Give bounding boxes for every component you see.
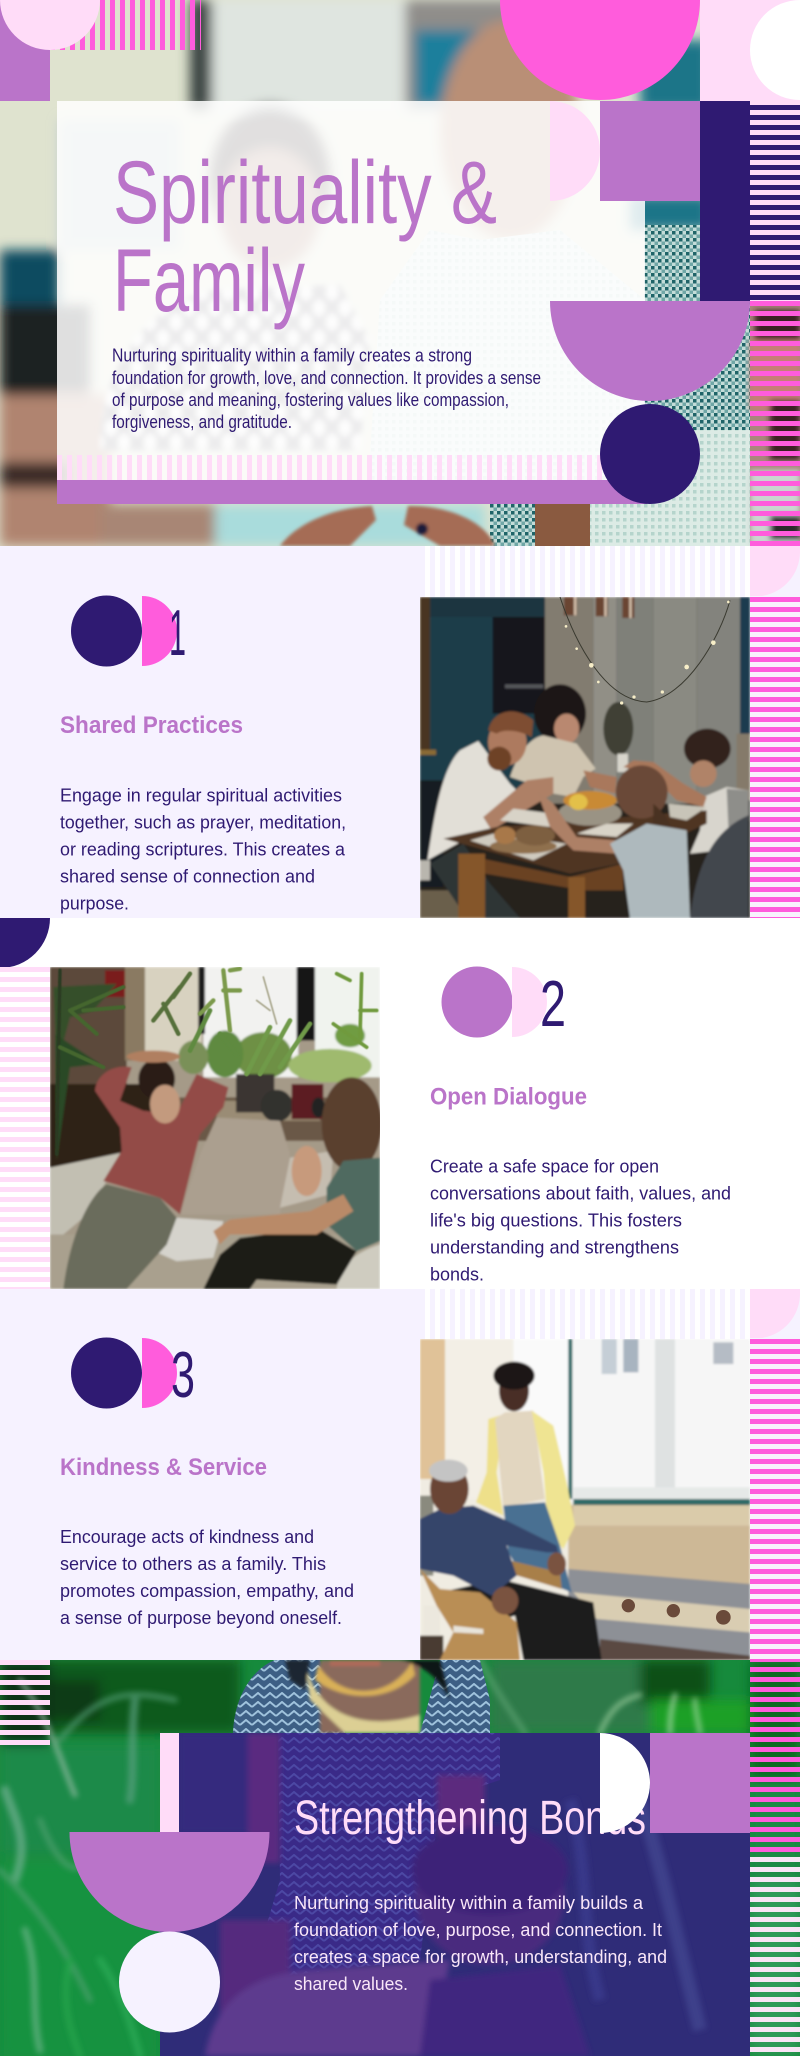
right magenta stripes: [750, 1660, 800, 1856]
section 3 magenta stripes: [750, 1339, 800, 1660]
title: Family: [113, 230, 305, 330]
panel: closing: [0, 1660, 800, 2056]
section 1 body: together, such as prayer, meditation,: [60, 812, 346, 832]
section 2 photo: two women on sofa: [50, 967, 380, 1289]
section 1 photo: family praying at table: [420, 597, 750, 918]
translucent title card: [57, 101, 645, 504]
section 1: shared practices: 1: [169, 596, 186, 669]
closing body: Nurturing spirituality within a family builds a: [294, 1893, 644, 1913]
closing photo: woman and child in grass: [0, 1660, 800, 2056]
section 2 body: bonds.: [430, 1264, 484, 1284]
section 2 body: Create a safe space for open: [430, 1156, 659, 1176]
section 1 background: [0, 546, 420, 918]
section 2 number icon: [442, 966, 566, 1040]
section 1 body: [60, 786, 346, 914]
navy circle: [600, 404, 700, 504]
section 3 body: [60, 1527, 354, 1628]
header family photo: [0, 0, 800, 546]
section 3 photo: man seated and woman standing: [420, 1339, 750, 1660]
title: [113, 142, 497, 330]
section 2 heading: Open Dialogue: [430, 1084, 587, 1110]
section 1: shared practices: [0, 546, 800, 918]
section 1 corner shape: [750, 546, 800, 597]
section 1 body: purpose.: [60, 894, 129, 914]
section 2 body: conversations about faith, values, and: [430, 1184, 731, 1204]
closing translucent panel with woman and child: [160, 1733, 750, 2056]
section 2 body: [430, 1156, 731, 1284]
section 2: open dialogue: [0, 918, 731, 1289]
intro text: forgiveness, and gratitude.: [112, 412, 292, 432]
intro text: of purpose and meaning, fostering values like compassion,: [112, 390, 509, 410]
section 1 body: Engage in regular spiritual activities: [60, 786, 342, 806]
section 1 body: or reading scriptures. This creates a: [60, 840, 346, 860]
pale half circle: [550, 101, 600, 201]
closing title: Strengthening Bonds: [294, 1792, 646, 1845]
section 3 body: service to others as a family. This: [60, 1554, 326, 1574]
closing body: shared values.: [294, 1974, 408, 1994]
section 1 body: shared sense of connection and: [60, 866, 315, 886]
top-right pale square: [700, 0, 800, 101]
closing body: [294, 1893, 667, 1994]
top vertical magenta stripes: [50, 0, 201, 50]
navy column: [700, 101, 750, 301]
navy quarter circle: [0, 918, 50, 968]
mauve half circle: [70, 1832, 270, 1932]
title: Spirituality &: [113, 142, 497, 242]
section 3 number icon: 3: [171, 1338, 195, 1411]
mauve half circle: [550, 301, 750, 401]
section 2 body: understanding and strengthens: [430, 1238, 679, 1258]
top-left pale circle: [0, 0, 100, 50]
section 3 top stripes: [420, 1289, 750, 1339]
white half circle: [600, 1733, 650, 1833]
left pale stripes: [0, 1660, 50, 1745]
section 3 number icon: [71, 1338, 195, 1411]
card mauve bar: [57, 480, 647, 504]
navy stripes: [750, 101, 800, 301]
section 1 heading: Shared Practices: [60, 712, 243, 739]
closing body: foundation of love, purpose, and connection. It: [294, 1920, 662, 1940]
mauve square: [600, 101, 700, 201]
panel: header: [0, 0, 800, 546]
section 3 body: Encourage acts of kindness and: [60, 1527, 314, 1547]
section 1 top stripes: [420, 546, 750, 597]
lavender circle: [119, 1932, 220, 2032]
section 3 corner shape: [750, 1289, 800, 1339]
section 3 heading: Kindness & Service: [60, 1454, 267, 1481]
section 2 body: life's big questions. This fosters: [430, 1210, 682, 1230]
card pale stripe band: [57, 455, 602, 480]
section 1 magenta stripes: [750, 597, 800, 918]
top-left mauve block: [0, 0, 50, 101]
magenta stripes right: [750, 301, 800, 546]
intro text: foundation for growth, love, and connection. It provides a sense: [112, 368, 541, 388]
section 3: kindness and service: [0, 1289, 800, 1660]
section 3 background: [0, 1289, 420, 1660]
intro text: [112, 346, 541, 432]
mauve square: [650, 1733, 750, 1833]
section 2 number icon: 2: [540, 967, 566, 1040]
closing body: creates a space for growth, understanding, and: [294, 1947, 667, 1967]
section 3 body: a sense of purpose beyond oneself.: [60, 1608, 342, 1628]
top-right white circle: [750, 0, 800, 100]
intro text: Nurturing spirituality within a family creates a strong: [112, 346, 472, 366]
right pale stripes: [750, 1856, 800, 2056]
pale vertical bar: [160, 1733, 179, 1832]
section 1 number icon: [71, 596, 186, 669]
section 2 pale stripes: [0, 967, 50, 1289]
section 3 body: promotes compassion, empathy, and: [60, 1581, 354, 1601]
top magenta circle: [500, 0, 700, 100]
